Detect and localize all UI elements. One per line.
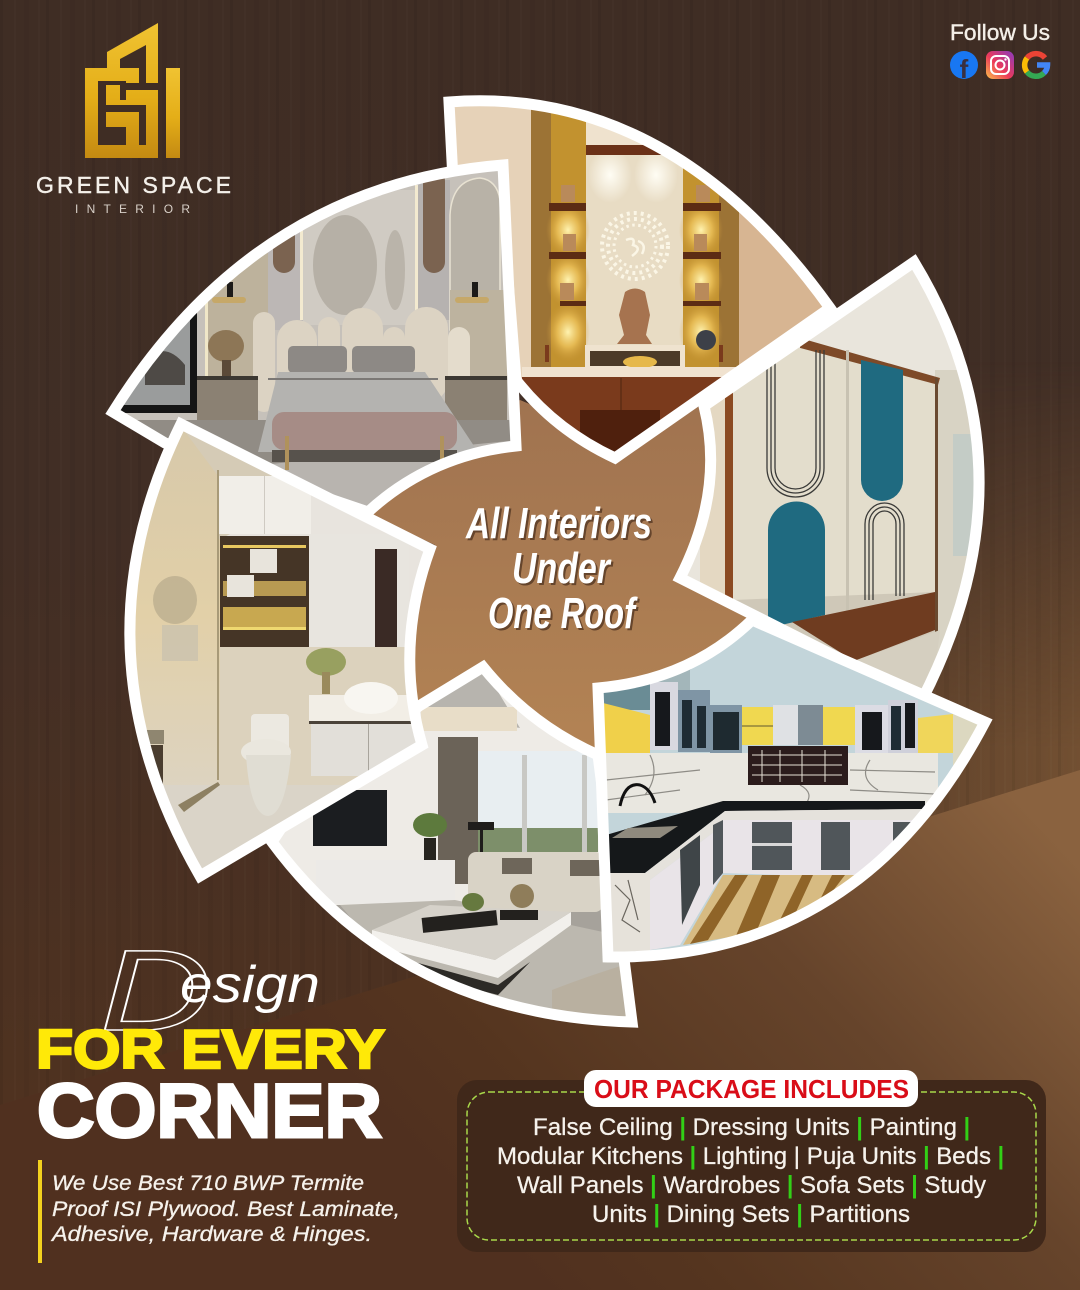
package list: Modular Kitchens | Lighting | Puja Units | Beds | bbox=[497, 1143, 1004, 1170]
panel: bathroom photo bbox=[120, 415, 440, 890]
icon: ganesha idol bbox=[617, 288, 652, 344]
panel: bedroom photo bbox=[110, 160, 520, 520]
base cabinets bbox=[723, 820, 912, 875]
centre heading: All Interiors Under One Roof: All Interiors bbox=[467, 501, 654, 550]
flowers bbox=[306, 648, 346, 676]
plant and lamps bbox=[208, 330, 244, 362]
floor bbox=[137, 420, 510, 464]
icon: gold building monogram bbox=[85, 23, 180, 158]
heading script: Design: esign bbox=[180, 956, 320, 1014]
materials note with accent bar: Proof ISI Plywood. Best Laminate, bbox=[52, 1197, 400, 1221]
package list: False Ceiling | Dressing Units | Painting | bbox=[533, 1114, 970, 1141]
centre heading: All Interiors Under One Roof: Under bbox=[514, 546, 614, 595]
centre heading: All Interiors Under One Roof: One Roof bbox=[490, 591, 640, 640]
heading: CORNER: CORNER bbox=[37, 1069, 382, 1154]
panel: living room photo bbox=[260, 660, 640, 1030]
window bbox=[748, 746, 848, 785]
materials note with accent bar: Adhesive, Hardware & Hinges. bbox=[50, 1222, 372, 1246]
panel: modular kitchen photo bbox=[590, 610, 1000, 970]
coffee table bbox=[417, 962, 530, 995]
materials note with accent bar bbox=[38, 1160, 400, 1263]
centre heading: All Interiors Under One Roof bbox=[465, 499, 654, 640]
background bbox=[0, 394, 1080, 1290]
brand subtitle: INTERIOR bbox=[75, 202, 190, 216]
backsplash bbox=[603, 753, 938, 813]
panel: puja unit photo bbox=[440, 90, 850, 477]
centre star panel bbox=[360, 400, 770, 770]
package heading pill: OUR PACKAGE INCLUDES bbox=[594, 1074, 909, 1104]
centre heading: All Interiors Under One Roof: One Roof bbox=[488, 589, 638, 638]
package list: Units | Dining Sets | Partitions bbox=[592, 1201, 910, 1228]
heading script: Design bbox=[100, 927, 320, 1055]
armchair bbox=[552, 966, 626, 1016]
countertop bbox=[606, 801, 925, 873]
side tables bbox=[197, 378, 258, 421]
window bbox=[953, 434, 975, 556]
icon: google bbox=[1025, 54, 1048, 76]
bed bbox=[258, 372, 478, 452]
toilet bbox=[251, 714, 289, 746]
marble base bbox=[610, 873, 650, 952]
wood floor bbox=[683, 875, 855, 945]
heading script: Design: D bbox=[100, 927, 212, 1055]
package list: Wall Panels | Wardrobes | Sofa Sets | Study bbox=[517, 1172, 986, 1199]
vanity bbox=[309, 695, 419, 721]
centre heading: All Interiors Under One Roof: Under bbox=[512, 544, 612, 593]
icon: om mandala bbox=[602, 213, 668, 279]
wardrobe wood drawers bbox=[792, 592, 935, 661]
faucet bbox=[620, 785, 655, 806]
floor bbox=[164, 785, 343, 868]
pillows bbox=[288, 346, 347, 373]
sofa bbox=[468, 852, 603, 912]
panel: package includes bbox=[457, 1070, 1046, 1252]
brand name: GREEN SPACE bbox=[36, 172, 231, 198]
heading: FOR EVERY: FOR EVERY bbox=[36, 1018, 385, 1080]
wardrobe blue arch bbox=[768, 502, 825, 628]
logo: Green Space Interior bbox=[36, 23, 231, 216]
centre heading: All Interiors Under One Roof: All Interiors bbox=[465, 499, 652, 548]
line art U bbox=[767, 350, 904, 600]
icon: facebook: f bbox=[960, 54, 969, 84]
icon: instagram bbox=[986, 51, 1014, 79]
headboard bbox=[253, 307, 470, 412]
shower glass and fixtures bbox=[217, 470, 219, 780]
follow us block bbox=[950, 20, 1050, 84]
follow us label: Follow Us bbox=[950, 20, 1050, 45]
materials note with accent bar: We Use Best 710 BWP Termite bbox=[52, 1171, 364, 1195]
package list bbox=[497, 1114, 1004, 1228]
wardrobe blue oval bbox=[861, 360, 903, 501]
panel: wardrobe photo bbox=[670, 250, 1000, 710]
